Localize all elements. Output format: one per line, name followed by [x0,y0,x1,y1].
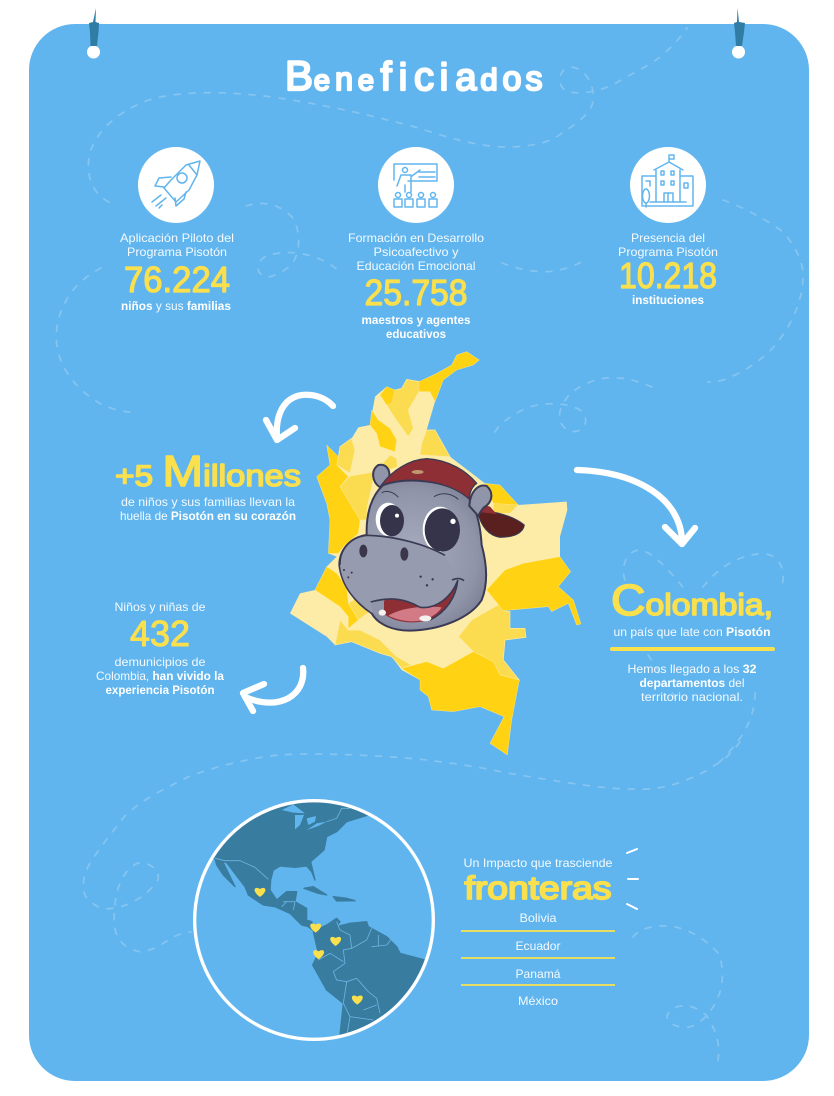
body [96,655,224,697]
title: o [503,60,521,98]
text: presencia: Presencia del [631,231,705,245]
arrow: bottom left [243,668,303,711]
snout [340,536,460,613]
text: 432 municipios [96,600,224,697]
smile line [452,579,464,581]
mouth outline [371,581,458,620]
title: a [455,57,477,99]
number: 432: 432 [130,613,190,654]
text: formacion: Psicoafectivo y [374,245,458,259]
lakes [282,804,327,830]
gray lip [371,600,384,616]
mouth [383,581,458,622]
text: +5 millones [115,447,301,523]
hearts [255,888,363,1005]
heading: fronteras [464,870,612,906]
countries [461,911,615,1008]
hanging clip left [87,8,100,58]
title: c [414,55,434,99]
title: i [399,57,407,99]
body: huella de Pisotón en su corazón [120,509,296,523]
body: demunicipios de [114,655,206,669]
map of Colombia [290,352,581,755]
body: Hemos llegado a los 32 [628,662,757,676]
title: e [358,65,374,97]
text: aplicacion piloto: Aplicación Piloto del [120,231,234,245]
cap brim [477,511,524,537]
country borders [215,808,393,1037]
text: ninos y sus familias: niños y sus familias [121,299,231,313]
title: B [285,52,313,99]
title: i [440,57,448,99]
globe ring [195,801,433,1039]
panel: presencia [618,147,718,307]
text: presencia: Programa Pisotón [618,245,718,259]
icon: teacher and classroom [378,147,454,223]
icon: school building [630,147,706,223]
hippo head [339,481,486,631]
body: experiencia Pisotón [106,683,214,697]
left ear [373,465,389,487]
nostrils [359,545,408,561]
teeth [379,610,431,621]
number: 25.758: 25.758 [364,272,468,313]
title: n [335,61,353,97]
icon: rocket [138,147,214,223]
subheading: un país que late con Pisotón [614,625,770,639]
body [120,495,296,523]
text: formacion [348,231,484,273]
countries: México [518,994,558,1008]
cap crown [382,459,477,499]
text: colombia [610,576,775,704]
arrow: top left [266,395,333,440]
text: formacion: Educación Emocional [356,259,476,273]
body: departamentos del [640,676,744,690]
text: fronteras list [461,849,638,1008]
panel: formacion [348,147,484,341]
countries: Ecuador [516,939,560,953]
tongue [388,607,442,621]
freckles [343,569,434,586]
text: instituciones: instituciones [632,293,704,307]
right ear [469,486,491,516]
text: aplicacion piloto [120,231,234,259]
cap brim top [478,505,497,514]
text: presencia [618,231,718,259]
text: aplicacion piloto: Programa Pisotón [127,245,227,259]
snout top line [340,535,445,565]
title: s [526,60,542,98]
cap button [412,470,424,474]
heading: +5 Millones [115,447,301,496]
title: f [380,55,392,99]
text: maestros: maestros y agentes [362,313,471,327]
hanging clip right [732,8,745,58]
land masses [214,802,425,1035]
globe [193,799,435,1041]
title: e [314,65,330,97]
yellow rule [610,647,775,651]
arrow: right [577,470,695,544]
text: maestros: educativos [386,327,446,341]
text: formacion: Formación en Desarrollo [348,231,484,245]
body: de niños y sus familias llevan la [121,495,295,509]
intro: Niños y niñas de [114,600,206,614]
body [628,662,757,704]
body: Colombia, han vivido la [96,669,224,683]
title: d [480,62,498,97]
text: maestros [362,313,471,341]
eyebrows [382,491,458,499]
countries: Panamá [516,967,561,981]
eyes [376,503,460,552]
mascot: hippo with red cap [339,459,524,631]
countries: Bolivia [520,911,557,925]
spark ticks [627,849,638,909]
panel: piloto [120,147,234,313]
intro: Un Impacto que trasciende [464,856,613,870]
body: territorio nacional. [641,690,743,704]
number: 10.218: 10.218 [619,255,717,296]
number: 76.224: 76.224 [124,259,230,300]
heading: Colombia, [611,576,773,625]
